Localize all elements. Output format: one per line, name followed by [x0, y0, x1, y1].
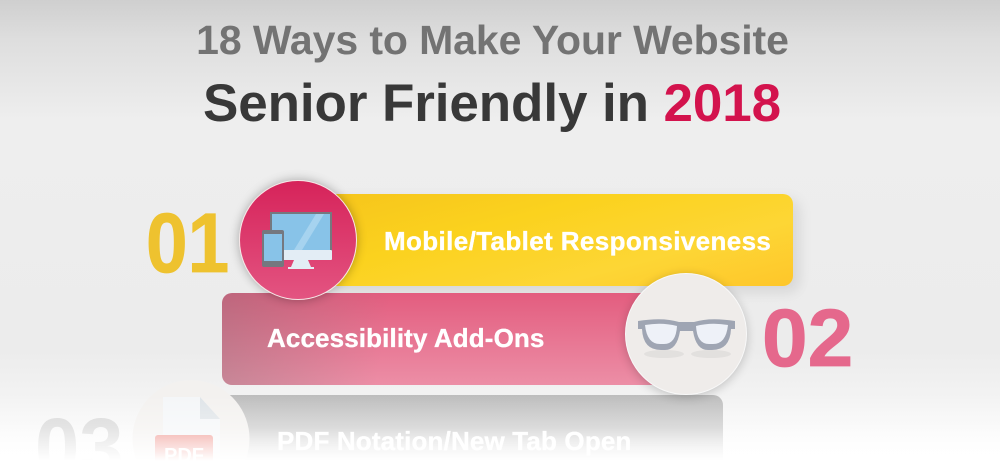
- title line 1: 18 Ways to Make Your Website: [196, 17, 789, 63]
- number 01: 01: [146, 196, 229, 290]
- number 02: 02: [762, 293, 853, 384]
- panel: item 01 bar: [334, 194, 802, 295]
- panel: item 01 badge: [146, 174, 362, 306]
- fade overlay: [0, 395, 1000, 468]
- icon: devices circle: [239, 180, 357, 300]
- label 03: PDF Notation/New Tab Open: [277, 426, 632, 456]
- panel: item 02: [222, 270, 853, 400]
- icon: devices: [262, 212, 332, 269]
- title line 2: Senior Friendly in 2018: [203, 74, 781, 133]
- panel: item 03: [35, 395, 723, 468]
- icon: glasses circle: [625, 273, 747, 395]
- title: [196, 17, 789, 133]
- icon: PDF circle: [155, 395, 250, 467]
- label 01: Mobile/Tablet Responsiveness: [384, 226, 771, 256]
- bar 03: [160, 395, 723, 468]
- icon: glasses: [638, 319, 735, 358]
- label 02: Accessibility Add-Ons: [267, 323, 545, 353]
- bar 01: [325, 194, 793, 286]
- icon: PDF circle: PDF: [164, 445, 204, 467]
- bar 02: [222, 293, 692, 385]
